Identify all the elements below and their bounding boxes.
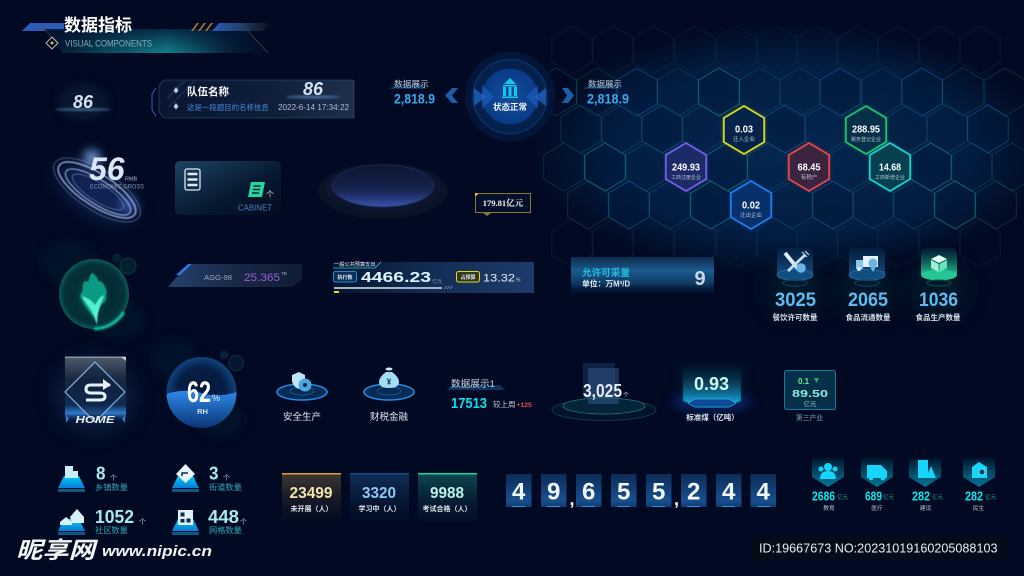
stat: grids: 448 — [208, 507, 239, 527]
stat: medical: 亿元 — [883, 493, 895, 501]
stat: standard coal — [670, 366, 754, 422]
panel: public budget: 执行数 — [337, 274, 353, 281]
team description: 这是一段题目的名称信息 — [187, 102, 269, 112]
icon: server — [185, 169, 200, 190]
stat: food distribution: 食品流通数量 — [846, 312, 891, 322]
stat: 3,025 platform — [552, 363, 656, 420]
card: exam passed: 9988 — [430, 485, 464, 502]
item: tax and finance: ¥ — [387, 378, 392, 386]
watermark: nipic: 昵享网 — [16, 537, 98, 563]
flip counter: , — [569, 489, 575, 509]
stat: medical: 医疗 — [871, 504, 883, 512]
metric: data display left — [389, 78, 435, 106]
leaf orb — [41, 240, 144, 340]
flip counter: 4 — [512, 478, 526, 506]
watermark: image id: ID:19667673 NO:20231019160205088103 — [759, 542, 998, 556]
icon: truck — [856, 256, 878, 272]
stat: tertiary industry: 89.50 — [792, 389, 829, 400]
panel: hexagon map — [532, 25, 1024, 275]
flip counter: 9 — [547, 478, 560, 506]
hexagon: 288.95 green: 288.95 — [852, 124, 880, 136]
panel: public budget: 占预算 — [460, 274, 476, 281]
stat: food production — [908, 248, 968, 322]
team name: 队伍名称 — [187, 85, 229, 98]
value 8 — [248, 182, 265, 197]
stat: education — [812, 458, 849, 512]
status badge — [465, 52, 555, 142]
metric: data display 1 — [447, 378, 532, 412]
flip counter: 5 — [652, 478, 665, 506]
metric: swirl 56: ECONOMIC GROSS — [90, 184, 145, 190]
humidity sphere — [153, 338, 244, 438]
tooltip: 179.81亿元 — [475, 193, 530, 216]
panel: permitted volume: 允许可采量 — [582, 267, 630, 279]
stat: construction: 建设 — [920, 504, 931, 512]
item: tax and finance — [364, 368, 414, 423]
icon: building and tree — [918, 460, 936, 478]
hexagon: 249.93 purple: 249.93 — [672, 162, 700, 174]
card: not started: 23499 — [290, 485, 333, 502]
stat: communities — [58, 507, 146, 535]
stat: construction — [909, 458, 944, 512]
stat: streets: 个 — [223, 474, 230, 482]
stat: tertiary industry: 第三产业 — [796, 413, 823, 422]
stat: streets: 3 — [209, 464, 218, 484]
metric: data display 1: +125 — [516, 402, 532, 409]
icon: box — [931, 255, 947, 272]
panel: team info — [152, 79, 354, 118]
hexagon: 288.95 green: 税务登记企业 — [851, 136, 881, 143]
stat: livelihood: 民生 — [973, 504, 984, 512]
flip counter: 4 — [722, 478, 736, 506]
hexagon: 288.95 green — [846, 106, 886, 154]
icon: leaf — [80, 273, 107, 326]
value 62: 62 — [187, 376, 211, 409]
hexagon: 14.68 teal: 14.68 — [879, 162, 901, 174]
panel: public budget: 亿元 — [432, 278, 442, 285]
stat: medical — [861, 458, 895, 512]
stat: medical: 689 — [865, 490, 882, 504]
stat: tertiary industry — [784, 370, 836, 422]
panel: AGG-98: AGG-98 — [204, 273, 232, 282]
metric: swirl 56: RMB — [125, 176, 138, 182]
icon: money bag — [386, 368, 392, 370]
hexagon: 0.02 blue: 迁出企业 — [740, 211, 762, 219]
stat: streets: 街道数量 — [209, 482, 242, 492]
hexagon: 249.93 purple — [666, 143, 706, 191]
budget percent: 13.32 — [483, 272, 515, 284]
hexagon: 14.68 teal: 工商新增企业 — [875, 174, 905, 181]
panel: permitted volume — [571, 257, 714, 295]
title block — [22, 16, 270, 53]
watermark: nipic: www.nipic.cn — [102, 543, 212, 560]
stat: catering licences: 3025 — [775, 290, 816, 311]
stat: construction: 282 — [912, 490, 930, 504]
flip counter: 6 — [582, 478, 595, 506]
heading: 数据指标 — [64, 16, 132, 35]
metric: data display right — [583, 79, 629, 106]
icon: buildings — [65, 466, 78, 478]
humidity sphere: RH — [197, 407, 208, 416]
panel: AGG-98: TB — [281, 271, 287, 276]
panel: AGG-98 — [168, 264, 302, 287]
icon: people — [818, 463, 838, 479]
stat: education: 教育 — [823, 504, 835, 512]
stat: livelihood — [963, 458, 997, 512]
stat: food production: 1036 — [919, 290, 958, 311]
card: studying: 学习中（人） — [358, 504, 400, 513]
panel: public budget — [333, 260, 534, 293]
stat: towns: 8 — [96, 464, 106, 484]
budget title: 一般公共预算支出 — [334, 260, 376, 268]
stat: catering licences: 餐饮许可数量 — [772, 312, 818, 322]
card: studying: 3320 — [362, 485, 396, 502]
home button — [55, 356, 135, 433]
tooltip: 179.81亿元: 179.81亿元 — [483, 198, 524, 208]
metric: swirl 56 — [44, 146, 150, 234]
metric: data display 1: 17513 — [451, 396, 487, 412]
hexagon: 0.03 yellow — [724, 106, 764, 154]
humidity sphere: % — [212, 393, 220, 403]
stat: food distribution — [837, 248, 897, 322]
stat: 3,025 platform: 3,025 — [583, 380, 622, 401]
icon: fork and knife — [785, 251, 809, 271]
value 9: 9 — [694, 268, 706, 290]
stat: livelihood: 282 — [965, 490, 983, 504]
hexagon: 249.93 purple: 工商注册企业 — [671, 174, 701, 181]
stat: catering licences — [765, 248, 825, 322]
flip counter — [506, 474, 776, 509]
stat: standard coal: 0.93 — [694, 373, 729, 394]
card: exam passed: 考试合格（人） — [422, 504, 472, 513]
icon: bank — [502, 78, 518, 98]
subtitle: VISUAL COMPONENTS — [65, 38, 152, 48]
panel: permitted volume: 单位：万M³/D — [582, 278, 630, 288]
stat: streets — [172, 464, 242, 492]
metric: data display left: 数据展示 — [394, 78, 429, 89]
watermark: nipic — [16, 537, 212, 563]
flip counter: 4 — [757, 478, 771, 506]
flip counter: , — [674, 489, 679, 509]
card: exam passed — [418, 473, 477, 521]
stat: tertiary industry: 0.1 — [798, 377, 810, 386]
card: studying — [350, 473, 409, 521]
stat: communities: 社区数量 — [95, 525, 128, 535]
team score: 86 — [303, 79, 324, 99]
stat: grids — [172, 507, 247, 535]
hexagon: 68.45 red: 68.45 — [798, 162, 821, 174]
icon: house search — [972, 462, 987, 478]
stat: grids: 网格数量 — [209, 525, 242, 535]
panel: cabinet — [175, 161, 281, 215]
hexagon: 14.68 teal — [870, 143, 910, 191]
icon: houses — [60, 509, 84, 525]
value 56: 56 — [89, 151, 125, 187]
metric: data display left: 2,818.9 — [394, 90, 435, 106]
icon: road sign — [176, 464, 195, 483]
stat: education: 2686 — [812, 490, 835, 504]
stat: towns: 乡镇数量 — [95, 482, 128, 492]
stat: communities: 个 — [139, 518, 146, 526]
stat: food production: 食品生产数量 — [916, 312, 961, 322]
hexagon: 0.03 yellow: 0.03 — [735, 124, 753, 136]
panel: cabinet: 个 — [266, 190, 274, 199]
card: not started — [282, 473, 341, 521]
icon: S arrow — [86, 385, 110, 400]
stat: towns — [58, 464, 128, 492]
stat: grids: 个 — [240, 518, 247, 526]
hexagon: 68.45 red: 有税户 — [801, 173, 817, 181]
metric: data display right: 数据展示 — [588, 79, 622, 89]
status label: 状态正常 — [493, 102, 527, 112]
stat: food distribution: 2065 — [848, 290, 888, 311]
metric: data display 1: 数据展示1 — [451, 378, 495, 390]
flip counter: 2 — [687, 478, 700, 506]
watermark: image id — [750, 537, 1009, 560]
metric: 86 small: 86 — [73, 92, 94, 112]
stat: construction: 亿元 — [932, 493, 944, 501]
icon: shield gear — [292, 372, 305, 389]
card: not started: 未开展（人） — [290, 504, 332, 513]
hexagon: 68.45 red — [789, 143, 829, 191]
stat: 3,025 platform: 个 — [623, 392, 629, 399]
metric: data display 1: 较上周 — [493, 399, 516, 409]
hexagon: 0.02 blue — [731, 181, 771, 229]
cabinet label: CABINET — [238, 204, 272, 212]
icon: grid box — [178, 510, 193, 525]
item: safe production: 安全生产 — [283, 411, 321, 423]
flip counter: 5 — [617, 478, 630, 506]
item: safe production — [277, 372, 327, 423]
arrow: right chevron — [562, 88, 574, 103]
stat: standard coal: 标准煤（亿吨） — [686, 412, 739, 422]
arrow: left chevron — [445, 88, 458, 103]
metric: data display right: 2,818.9 — [587, 90, 629, 106]
stat: education: 亿元 — [837, 493, 849, 501]
budget value: 4466.23 — [361, 269, 431, 286]
item: tax and finance: 财税金融 — [370, 411, 408, 423]
metric: 86 small — [55, 84, 111, 120]
hexagon: 0.02 blue: 0.02 — [742, 200, 760, 212]
icon: ambulance — [867, 465, 887, 480]
platform disc — [318, 163, 448, 219]
panel: public budget: % — [516, 278, 521, 284]
hexagon: 0.03 yellow: 迁入企业 — [733, 135, 755, 143]
team date: 2022-6-14 17:34:22 — [278, 103, 349, 112]
home label: HOME — [76, 415, 115, 426]
stat: communities: 1052 — [95, 507, 134, 527]
panel: AGG-98: 25.365 — [244, 272, 280, 284]
stat: livelihood: 亿元 — [985, 493, 997, 501]
stat: towns: 个 — [110, 474, 117, 482]
stat: tertiary industry: 亿元 — [804, 399, 817, 408]
